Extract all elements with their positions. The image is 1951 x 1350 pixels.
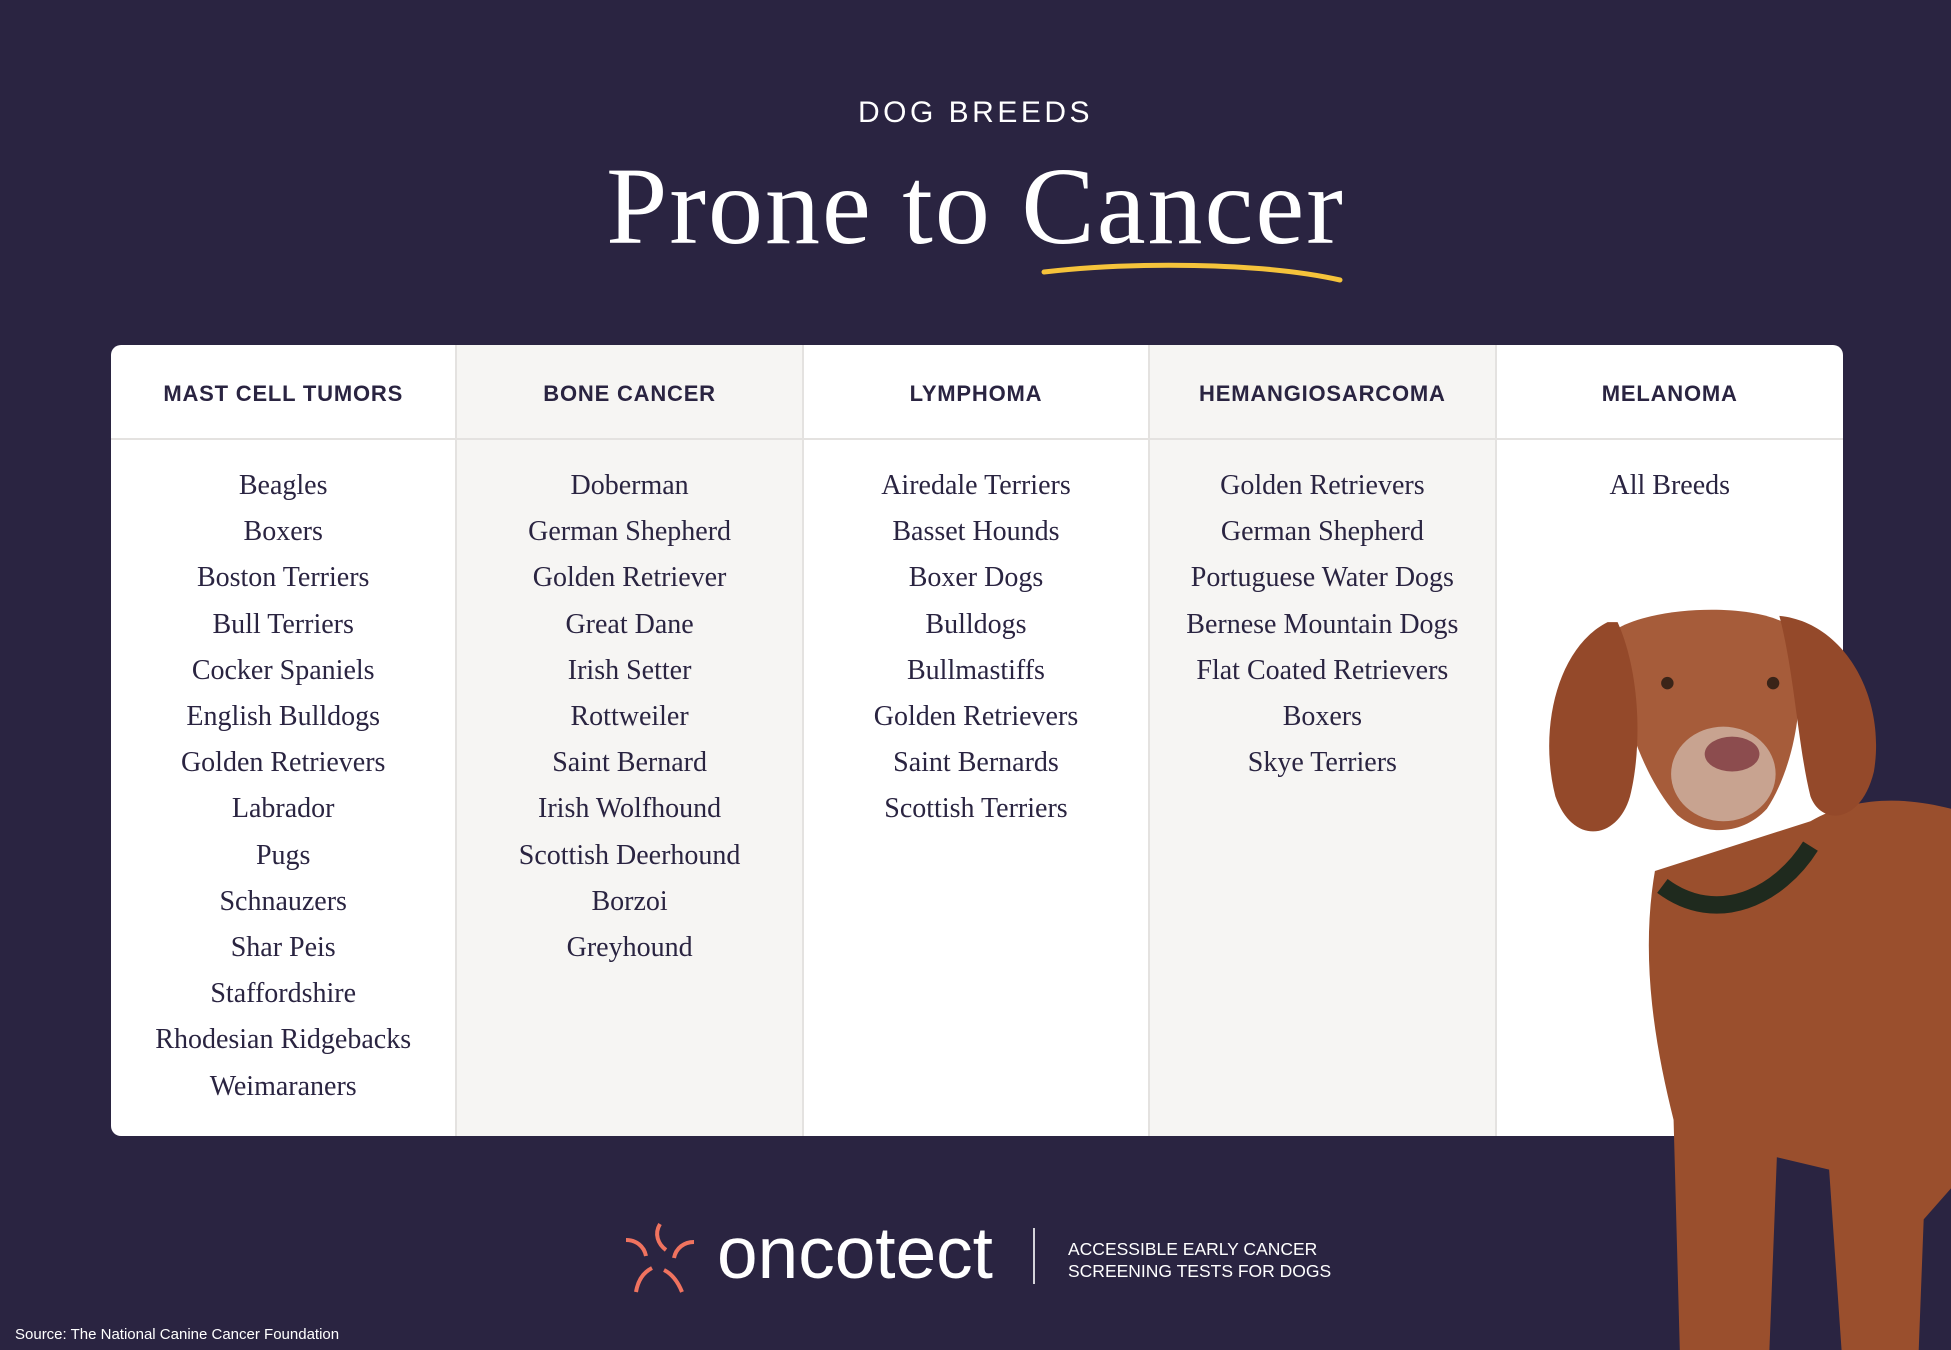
column: melanoma (1497, 380, 1843, 501)
column: lymphoma: Airedale Terriers (881, 470, 1071, 501)
column: bone cancer: Great Dane (565, 609, 694, 640)
column: mast cell tumors: Bull Terriers (212, 609, 354, 640)
column: melanoma: MELANOMA (1602, 380, 1738, 406)
column: bone cancer (457, 345, 804, 1136)
tagline: SCREENING TESTS FOR DOGS (1068, 1261, 1331, 1281)
column: mast cell tumors: MAST CELL TUMORS (163, 380, 403, 406)
column: mast cell tumors: Schnauzers (219, 886, 347, 917)
column: mast cell tumors: Boxers (244, 516, 323, 547)
column: bone cancer: Rottweiler (570, 701, 689, 732)
column: bone cancer: Borzoi (591, 886, 668, 917)
column: bone cancer: Scottish Deerhound (519, 840, 740, 871)
column: mast cell tumors: Cocker Spaniels (192, 655, 375, 686)
column: lymphoma: LYMPHOMA (910, 380, 1042, 406)
column: mast cell tumors: Beagles (239, 470, 328, 501)
column: hemangiosarcoma: German Shepherd (1221, 516, 1424, 547)
column: hemangiosarcoma: Portuguese Water Dogs (1191, 562, 1454, 593)
column: mast cell tumors: Golden Retrievers (181, 747, 385, 778)
kicker: dog breeds: DOG BREEDS (858, 96, 1093, 129)
tagline: ACCESSIBLE EARLY CANCER (1068, 1239, 1317, 1259)
title: Prone to Cancer (606, 145, 1345, 267)
column: lymphoma: Golden Retrievers (874, 701, 1078, 732)
icon: oncotect mark (626, 1223, 694, 1293)
column: bone cancer: BONE CANCER (543, 380, 716, 406)
column: bone cancer: Irish Wolfhound (538, 793, 721, 824)
column: bone cancer: Doberman (570, 470, 689, 501)
column: bone cancer: Greyhound (567, 932, 693, 963)
column: lymphoma: Basset Hounds (892, 516, 1060, 547)
column: mast cell tumors: Staffordshire (210, 978, 356, 1009)
column: melanoma: All Breeds (1609, 470, 1730, 501)
column: mast cell tumors: Pugs (256, 840, 310, 871)
column: bone cancer: Saint Bernard (552, 747, 707, 778)
column: bone cancer: Irish Setter (568, 655, 691, 686)
column: bone cancer: German Shepherd (528, 516, 731, 547)
column: lymphoma: Scottish Terriers (884, 793, 1068, 824)
column: mast cell tumors (111, 345, 457, 1136)
source note: Source: The National Canine Cancer Foundation (15, 1326, 339, 1343)
column: bone cancer: Golden Retriever (533, 562, 726, 593)
wordmark: oncotect (717, 1213, 993, 1294)
column: mast cell tumors: Weimaraners (210, 1071, 357, 1102)
column: hemangiosarcoma: Boxers (1283, 701, 1362, 732)
column: hemangiosarcoma: HEMANGIOSARCOMA (1199, 380, 1446, 406)
column: hemangiosarcoma: Flat Coated Retrievers (1196, 655, 1448, 686)
yellow underline (1042, 262, 1342, 282)
divider (1033, 1228, 1035, 1284)
logo: oncotect (626, 1213, 1331, 1294)
column: mast cell tumors: Labrador (232, 793, 334, 824)
column: lymphoma: Bullmastiffs (907, 655, 1045, 686)
column: lymphoma (804, 345, 1150, 1136)
tagline (1068, 1239, 1331, 1281)
column: lymphoma: Boxer Dogs (909, 562, 1043, 593)
column: mast cell tumors: Shar Peis (231, 932, 336, 963)
table (111, 345, 1843, 1136)
column: lymphoma: Bulldogs (925, 609, 1027, 640)
column: hemangiosarcoma: Golden Retrievers (1220, 470, 1425, 501)
column: mast cell tumors: English Bulldogs (186, 701, 380, 732)
column: mast cell tumors: Rhodesian Ridgebacks (155, 1024, 411, 1055)
column: hemangiosarcoma: Skye Terriers (1248, 747, 1397, 778)
column: mast cell tumors: Boston Terriers (197, 562, 369, 593)
column: hemangiosarcoma: Bernese Mountain Dogs (1186, 609, 1458, 640)
column: hemangiosarcoma (1150, 345, 1497, 1136)
column: lymphoma: Saint Bernards (893, 747, 1059, 778)
